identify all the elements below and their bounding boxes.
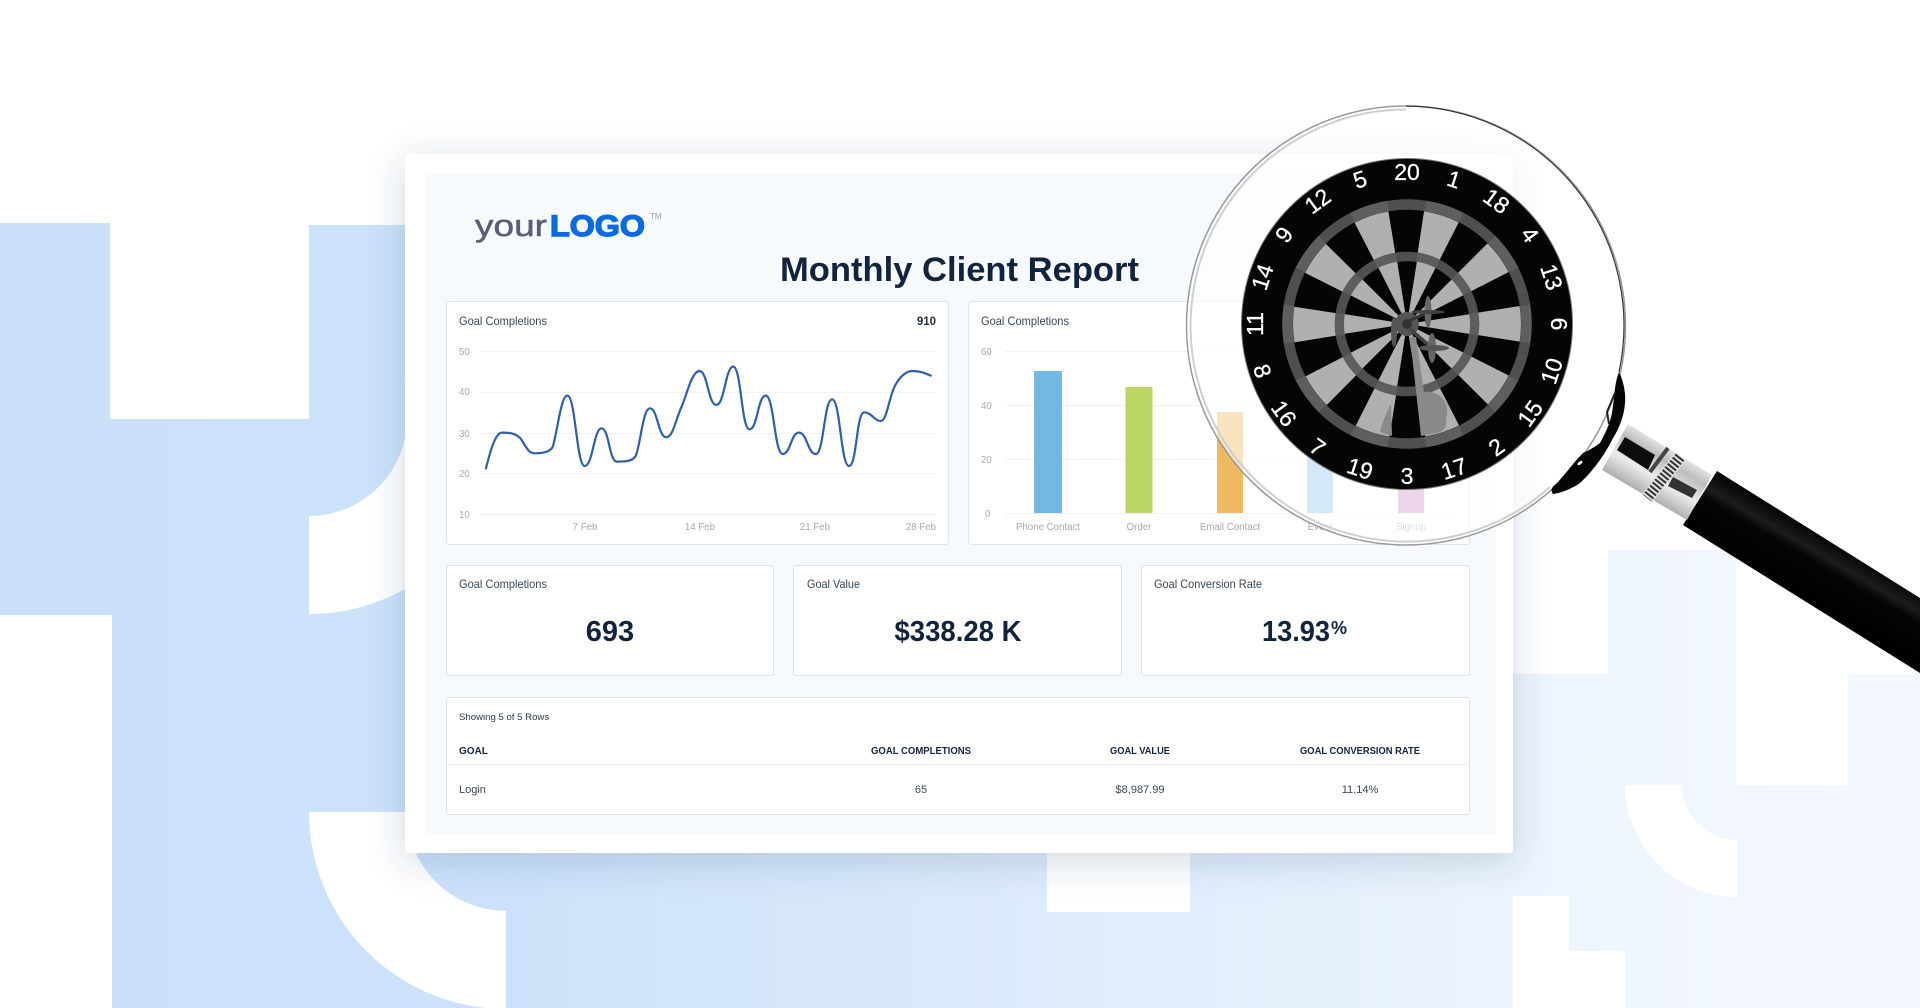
- bar labels: [1016, 522, 1426, 533]
- numbers: 16: [1266, 395, 1302, 431]
- numbers: 15: [1512, 395, 1548, 431]
- outer singles: [1301, 218, 1513, 430]
- numbers: 6: [1546, 318, 1572, 330]
- logo: your: [475, 208, 547, 243]
- y axis labels: 60: [981, 347, 992, 358]
- numbers: 14: [1246, 261, 1279, 293]
- logo: LOGO: [550, 210, 645, 243]
- panel: kpi goal value: [794, 566, 1122, 676]
- panel: kpi goal value: $338.28 K: [894, 616, 1022, 648]
- table header: GOAL VALUE: [1110, 746, 1170, 757]
- bar labels: Email Contact: [1200, 522, 1260, 533]
- numbers: 20: [1394, 159, 1420, 185]
- y axis labels: 0: [985, 509, 991, 520]
- y axis labels: 50: [459, 347, 470, 358]
- x axis labels: 7 Feb: [573, 522, 597, 533]
- y axis labels: 30: [459, 429, 470, 440]
- numbers: 7: [1305, 433, 1330, 461]
- chart title: Goal Completions: [981, 314, 1069, 328]
- x axis labels: 28 Feb: [906, 522, 936, 533]
- lens clip: [1552, 372, 1625, 494]
- y axis labels: 40: [459, 387, 470, 398]
- background shapes: [0, 223, 1920, 1008]
- numbers: 1: [1444, 165, 1464, 194]
- numbers: 18: [1478, 183, 1514, 219]
- panel: kpi goal conversion rate: [1142, 566, 1470, 676]
- double ring: [1270, 187, 1544, 461]
- treble ring: [1330, 247, 1484, 401]
- bullseye and darts: [1391, 296, 1449, 363]
- chart total: 910: [917, 316, 936, 328]
- bar labels: Order: [1127, 522, 1152, 533]
- numbers: [1242, 159, 1572, 489]
- logo: TM: [650, 212, 662, 221]
- panel: kpi goal conversion rate: %: [1331, 618, 1347, 638]
- numbers: 2: [1484, 433, 1509, 461]
- numbers: 10: [1535, 355, 1568, 387]
- bar labels: Event: [1308, 522, 1333, 533]
- table header: GOAL COMPLETIONS: [871, 746, 971, 757]
- dart shadows: [1380, 337, 1447, 436]
- panel: kpi goal completions: 693: [586, 616, 634, 648]
- numbers: 3: [1401, 463, 1413, 489]
- numbers: 5: [1350, 165, 1370, 194]
- icon: magnifying glass: [1186, 106, 1920, 673]
- table row: login: Login: [459, 784, 486, 796]
- table row: login: [459, 784, 1378, 796]
- y axis labels: [981, 347, 992, 520]
- numbers: 12: [1300, 183, 1336, 219]
- table row: login: 11.14%: [1342, 784, 1378, 796]
- logo: [475, 208, 662, 243]
- table header: [459, 746, 1420, 757]
- panel: kpi goal completions: [446, 566, 774, 676]
- table row: login: 65: [915, 784, 927, 796]
- x axis labels: [573, 522, 936, 533]
- numbers: 9: [1270, 222, 1298, 247]
- inner singles: [1366, 283, 1448, 365]
- panel: kpi goal conversion rate: Goal Conversion Rate: [1154, 577, 1262, 591]
- y axis labels: 20: [981, 455, 992, 466]
- chart title: Goal Completions: [459, 314, 547, 328]
- numbers: 8: [1248, 361, 1277, 381]
- title: Monthly Client Report: [780, 251, 1139, 289]
- x axis labels: 21 Feb: [800, 522, 830, 533]
- table header: GOAL: [459, 746, 488, 757]
- numbers: 4: [1516, 222, 1544, 248]
- ferrule: [1602, 424, 1712, 520]
- numbers: 13: [1535, 261, 1568, 293]
- y axis labels: [459, 347, 470, 521]
- bars: [1034, 371, 1424, 513]
- panel: kpi goal conversion rate: 13.93: [1262, 616, 1330, 648]
- panel: report card: [405, 154, 1513, 853]
- panel: kpi goal value: Goal Value: [807, 577, 860, 591]
- panel: goal table: [446, 698, 1470, 814]
- panel: bar chart: [968, 302, 1470, 544]
- row count: Showing 5 of 5 Rows: [459, 712, 549, 723]
- y axis labels: 10: [459, 510, 470, 521]
- numbers: 17: [1438, 452, 1470, 485]
- x axis labels: 14 Feb: [685, 522, 715, 533]
- bar labels: Signup: [1396, 522, 1426, 533]
- handle: [1683, 471, 1920, 673]
- panel: kpi goal completions: Goal Completions: [459, 577, 547, 591]
- y axis labels: 20: [459, 469, 470, 480]
- table header: GOAL CONVERSION RATE: [1300, 746, 1420, 757]
- bar labels: Phone Contact: [1016, 522, 1080, 533]
- numbers: 19: [1344, 452, 1376, 485]
- numbers: 11: [1242, 312, 1268, 336]
- table row: login: $8,987.99: [1116, 784, 1164, 796]
- panel: line chart: [446, 302, 948, 544]
- y axis labels: 40: [981, 401, 992, 412]
- lens glass: [1187, 106, 1625, 544]
- icon: dartboard: [1242, 158, 1572, 490]
- lens rim: [1186, 106, 1626, 545]
- line series: [486, 367, 932, 469]
